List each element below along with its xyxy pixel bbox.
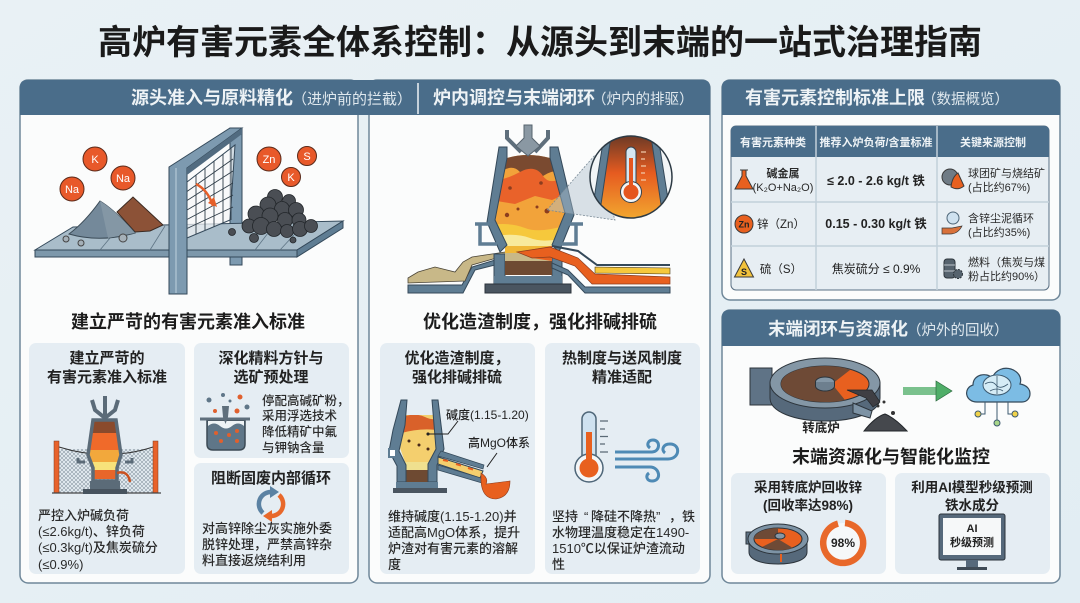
card: thermal and blast regime: 降硅不降热 (591, 509, 656, 524)
card: fine ore policy: 选矿预处理 (233, 368, 309, 386)
card: fine ore policy: 降低精矿中氟 (262, 424, 338, 439)
chart: 98 percent donut: 98% (831, 536, 855, 550)
icon: slag tapping furnace: 碱度(1.15-1.20) (446, 407, 529, 422)
row: alkali metals (735, 166, 1045, 194)
panel: hazard limits table: 有害元素控制标准上限 (745, 87, 925, 108)
card: fine ore policy: 采用浮选技术 (262, 408, 338, 423)
icon: slag tapping furnace (389, 400, 530, 499)
card: fine ore policy (194, 343, 350, 458)
card: admission standard: (≤0.3kg/t)及焦炭硫分 (38, 540, 158, 555)
table: 关键来源控制 (960, 135, 1026, 149)
row: sulfur: 燃料（焦炭与煤 (968, 255, 1045, 269)
header bar: left and middle panels (20, 80, 710, 115)
card: block solid waste recycling: 阻断固废内部循环 (211, 469, 331, 487)
panel: end-of-line recycling (722, 310, 1060, 583)
panel heading: 优化造渣制度，强化排碱排硫 (423, 311, 657, 332)
row: sulfur: 焦炭硫分 ≤ 0.9% (832, 261, 921, 276)
row: alkali metals: 球团矿与烧结矿 (968, 166, 1045, 180)
panel: furnace control (369, 80, 710, 583)
card: thermal and blast regime: 精准适配 (592, 368, 652, 386)
icon: monitor (939, 514, 1005, 570)
card: thermal and blast regime: 热制度与送风制度 (562, 349, 682, 367)
card: slag regime: 维持碱度(1.15-1.20)并 (388, 509, 517, 524)
callout: magnified thermometer (547, 136, 672, 220)
row: alkali metals: (K₂O+Na₂O) (753, 182, 813, 194)
card: admission standard (29, 343, 185, 574)
header bar: left and middle panels: （炉内的排驱） (592, 91, 694, 108)
card: thermal and blast regime: 性 (552, 557, 565, 572)
table: 推荐入炉负荷/含量标准 (819, 135, 933, 149)
icon: monitor: 秒级预测 (950, 535, 994, 549)
row: alkali metals: ≤ 2.0 - 2.6 kg/t 铁 (827, 173, 925, 188)
element badges: Zn (263, 154, 275, 166)
panel: end-of-line recycling: 末端闭环与资源化 (768, 319, 908, 339)
panel: hazard limits table: （数据概览） (922, 91, 1009, 108)
panel: end-of-line recycling: （炉外的回收） (907, 322, 1008, 339)
card: thermal and blast regime: 1510℃以保证炉渣流动 (552, 541, 685, 556)
card: slag regime: 适配高MgO体系，提升 (388, 525, 520, 540)
card: zinc recovery: 采用转底炉回收锌 (754, 479, 862, 495)
row: alkali metals: (占比约67%) (968, 180, 1030, 194)
panel: hazard limits table (722, 80, 1060, 300)
header bar: left and middle panels: （进炉前的拦截） (292, 91, 412, 108)
card: block solid waste recycling (194, 463, 349, 574)
title: 高炉有害元素全体系控制：从源头到末端的一站式治理指南 (98, 24, 982, 62)
card: block solid waste recycling: 料直接返烧结利用 (202, 553, 306, 568)
row: zinc: Zn (738, 220, 750, 230)
card: admission standard: 建立严苛的 (69, 349, 145, 367)
icon: wind (615, 440, 678, 481)
card: AI prediction (895, 473, 1050, 574)
row: sulfur: S (741, 267, 747, 277)
header bar: left and middle panels: 源头准入与原料精化 (131, 87, 293, 108)
header bar: left and middle panels: 炉内调控与末端闭环 (433, 87, 595, 108)
icon: flotation tank (200, 393, 250, 450)
card: fine ore policy: 深化精料方针与 (218, 349, 324, 367)
card: thermal and blast regime: 坚持 (552, 509, 578, 524)
row: zinc: (占比约35%) (968, 225, 1030, 239)
card: admission standard: 严控入炉碱负荷 (38, 508, 129, 523)
icon: coal pile (228, 190, 318, 243)
card: thermal and blast regime: ，铁 (669, 509, 695, 524)
element badges (60, 146, 316, 201)
icon: monitor: AI (966, 523, 978, 535)
card: thermal and blast regime: 水物理温度稳定在1490- (552, 525, 689, 540)
card: slag regime: 炉渣对有害元素的溶解 (388, 541, 518, 556)
icon: gray and brown ore piles (63, 197, 163, 246)
row: sulfur: 粉占比约90%） (968, 269, 1045, 283)
panel heading: 建立严苛的有害元素准入标准 (71, 311, 305, 332)
card: admission standard: 有害元素准入标准 (47, 368, 167, 386)
card: slag regime: 优化造渣制度， (404, 349, 510, 367)
card: zinc recovery: (回收率达98%) (763, 497, 853, 513)
row: sulfur (734, 255, 1045, 283)
label: rotary hearth furnace: 转底炉 (802, 420, 840, 435)
table: 有害元素种类 (740, 135, 806, 149)
chart: 98 percent donut (823, 523, 863, 563)
row: zinc: 锌（Zn） (757, 217, 805, 231)
row: zinc: 0.15 - 0.30 kg/t 铁 (825, 216, 927, 231)
element badges: Na (116, 173, 131, 185)
row: alkali metals: 碱金属 (766, 166, 800, 180)
icon: AI cloud brain (967, 368, 1030, 426)
row: sulfur: 硫（S） (760, 262, 802, 276)
card: AI prediction: 铁水成分 (945, 497, 999, 513)
panel heading: 末端资源化与智能化监控 (792, 446, 990, 467)
card: block solid waste recycling: 对高锌除尘灰实施外委 (202, 521, 332, 536)
icon: rotary hearth furnace (750, 358, 907, 431)
icon: thermometer (575, 412, 608, 482)
element badges: K (287, 172, 295, 184)
card: AI prediction: 利用AI模型秒级预测 (911, 479, 1033, 495)
illustration: blast furnace cross-section (408, 125, 670, 293)
arrow: green (903, 381, 952, 401)
card: block solid waste recycling: 脱锌处理，严禁高锌杂 (202, 537, 332, 552)
panel: source control (20, 80, 358, 583)
card: thermal and blast regime: ” (656, 509, 660, 524)
card: thermal and blast regime: “ (584, 509, 588, 524)
card: thermal and blast regime (545, 343, 700, 574)
card: slag regime: 强化排碱排硫 (412, 368, 502, 386)
card: fine ore policy: 停配高碱矿粉， (262, 393, 350, 408)
card: admission standard: (≤0.9%) (38, 557, 83, 572)
illustration: ore screening gate (35, 128, 343, 294)
icon: furnace with net fence (52, 396, 161, 494)
icon: slag tapping furnace: 高MgO体系 (468, 435, 530, 450)
icon: recycle arrows (259, 486, 283, 522)
card: fine ore policy: 与钾钠含量 (262, 440, 325, 455)
row: zinc (735, 211, 1034, 239)
element badges: Na (65, 184, 80, 196)
card: zinc recovery (731, 473, 886, 574)
element badges: S (303, 151, 311, 163)
element badges: K (91, 154, 99, 166)
card: slag regime (380, 343, 535, 574)
icon: rotary furnace small (746, 524, 808, 564)
table (731, 126, 1049, 290)
card: slag regime: 度 (388, 557, 401, 572)
card: admission standard: (≤2.6kg/t)、锌负荷 (38, 524, 145, 539)
row: zinc: 含锌尘泥循环 (968, 211, 1034, 225)
